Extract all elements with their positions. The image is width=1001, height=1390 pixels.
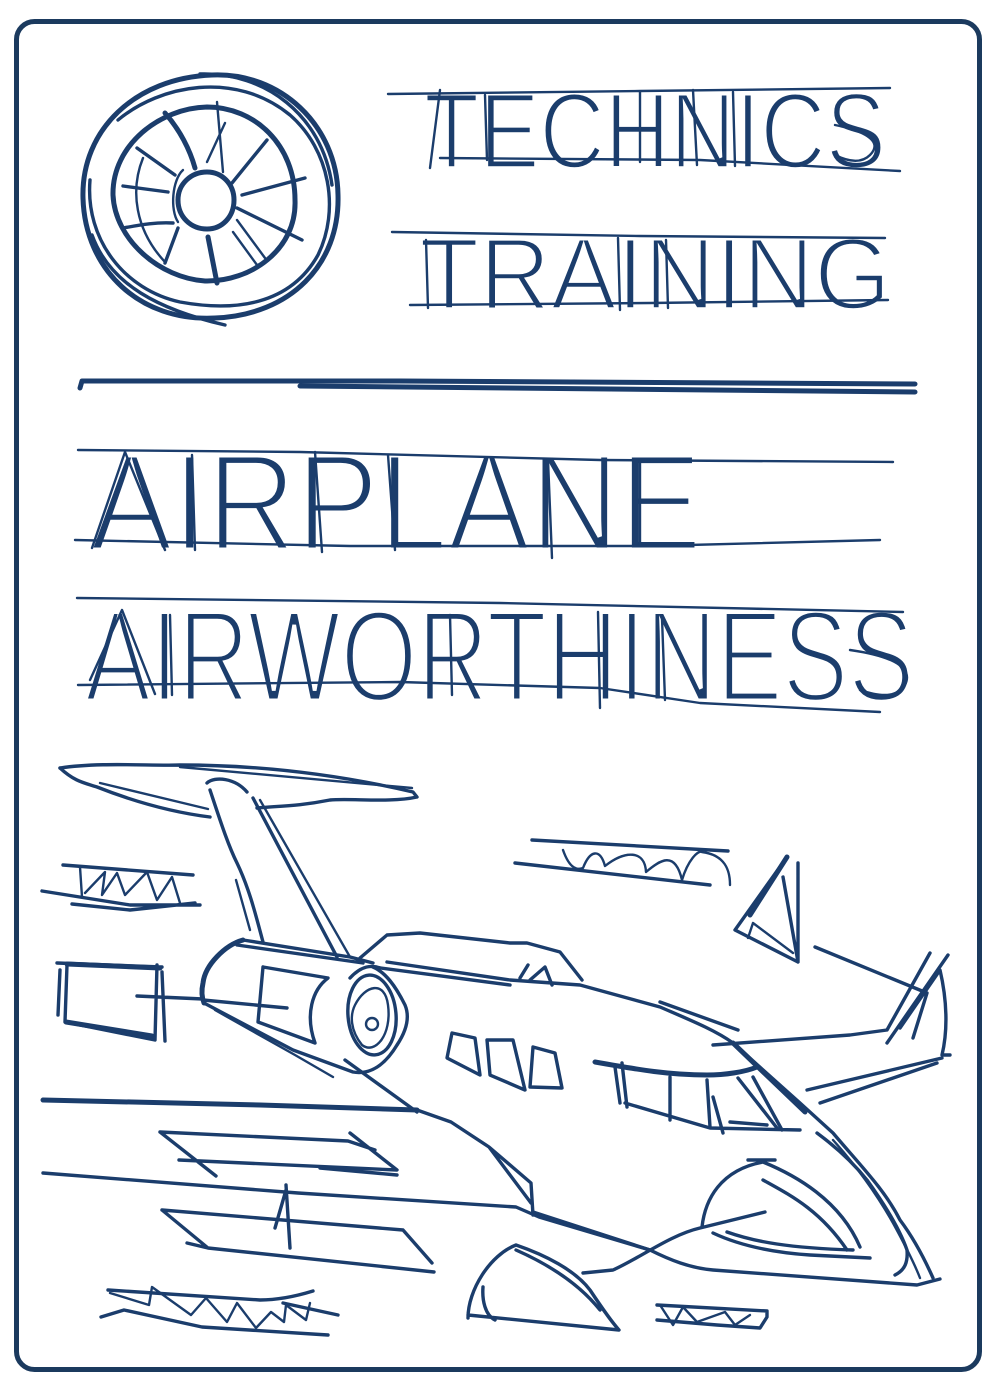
windshield [595,1062,800,1133]
box with tail line [57,963,203,1041]
engine inlet [345,973,399,1057]
heading: airplane: AIRPLANE [90,426,702,580]
illustration: airplane [42,765,950,1335]
flap lower [162,1185,434,1272]
cabin windows [447,1033,562,1090]
divider [80,381,915,392]
tail fin [207,779,350,957]
title: technics training [419,70,891,331]
zigzag mark top right [515,840,730,885]
engine panel [203,967,328,1043]
zigzag mark small [657,1305,767,1328]
landing wheel [468,1245,619,1330]
guide lines and sketch strokes: lower heading [75,450,907,712]
title: airplane airworthiness [85,426,914,729]
lower wing [43,1060,650,1250]
triangle [735,857,798,962]
guide lines and sketch strokes: top heading [388,88,900,310]
heading: training: TRAINING [419,217,891,331]
tail wing [60,765,417,817]
heading: technics: TECHNICS [424,70,886,191]
zigzag mark left [42,865,200,910]
nose dome [583,1160,870,1273]
fuselage [360,933,940,1285]
far wing [713,947,950,1103]
zigzag mark bottom [101,1287,338,1335]
engine nacelle [202,940,407,1077]
flap upper [160,1132,397,1176]
icon: turbine fan [83,74,338,325]
